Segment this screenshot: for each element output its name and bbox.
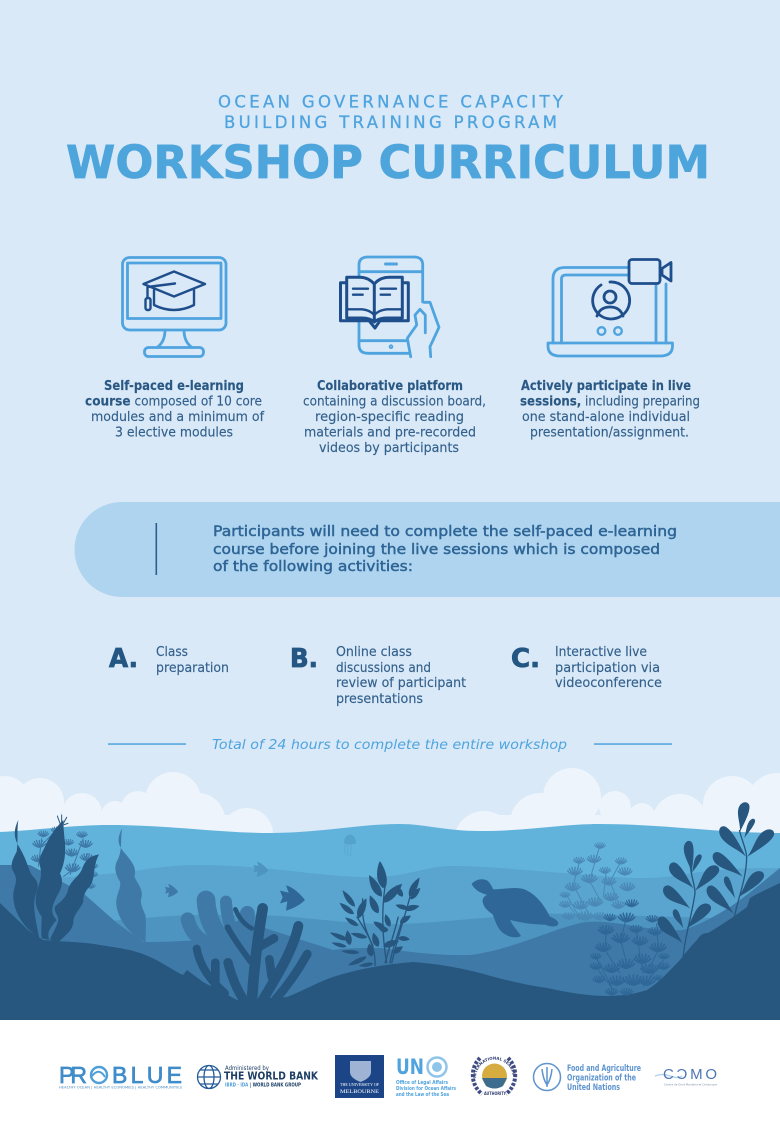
subtitle: BUILDING TRAINING PROGRAM	[224, 113, 557, 132]
leaf plant right part	[385, 897, 410, 963]
logo: CDMO: Centre de Droit Maritime et Océanique	[664, 1082, 717, 1086]
text: live sessions	[520, 379, 700, 441]
activity A: Class	[156, 645, 188, 660]
clouds	[0, 768, 780, 871]
activity B: presentations	[336, 692, 423, 707]
kelp frond 3	[50, 854, 99, 943]
logo: PROBLUE: HEALTHY OCEAN | HEALTHY ECONOMIES | HEALTHY COMMUNITIES	[59, 1086, 182, 1090]
text: self-paced e-learning: 3 elective modules	[115, 426, 233, 441]
seaweed with round leaves	[683, 830, 747, 957]
activity A: preparation	[156, 661, 229, 676]
logo: UN Ocean Affairs: Office of Legal Affairs	[396, 1080, 448, 1086]
logo: FAO: United Nations	[567, 1083, 620, 1093]
callout text: course before joining the live sessions which is composed	[213, 542, 660, 558]
logo: University of Melbourne: MELBOURNE	[340, 1089, 380, 1095]
coral tip	[57, 815, 68, 825]
plants right foreground	[375, 801, 776, 995]
text: self-paced e-learning: course composed of 10 core	[85, 395, 262, 410]
leaf plant	[376, 861, 388, 889]
logo: International Seabed Authority: INTERNATIONAL SEABED	[473, 1056, 516, 1078]
activity C: participation via	[555, 661, 660, 676]
activity A	[109, 644, 229, 676]
turtle	[472, 879, 558, 937]
fish: faint	[253, 862, 268, 877]
back coral	[188, 900, 248, 950]
water layer 1	[0, 824, 780, 1020]
logo: UN Ocean Affairs: Division for Ocean Affairs	[396, 1086, 456, 1092]
text: self-paced e-learning	[85, 379, 264, 441]
fish: large	[280, 885, 305, 911]
ocean scene	[0, 768, 780, 1020]
logo: FAO	[534, 1064, 641, 1093]
logo: PROBLUE: PR	[59, 1062, 87, 1088]
logo: PROBLUE	[59, 1062, 182, 1090]
tuft plant front	[590, 900, 669, 995]
text: live sessions: presentation/assignment.	[530, 426, 689, 441]
logo: University of Melbourne	[335, 1055, 384, 1098]
callout text	[213, 524, 677, 575]
text: live sessions: sessions, including preparing	[520, 395, 700, 410]
text: self-paced e-learning: Self-paced e-learning	[104, 379, 244, 394]
activity C: Interactive live	[555, 645, 647, 660]
activity B: review of participant	[336, 676, 466, 691]
activity B: B.	[290, 644, 318, 674]
water layer 5: seabed	[0, 883, 780, 1020]
activity C: C.	[511, 644, 540, 674]
icon: laptop with video call	[548, 260, 672, 356]
icon: monitor with graduation cap	[122, 258, 226, 356]
logo: International Seabed Authority	[470, 1056, 518, 1096]
leaf plant stems	[357, 887, 403, 966]
logo: World Bank: THE WORLD BANK	[224, 1070, 319, 1082]
fish: small left	[165, 884, 178, 897]
activity B: discussions and	[336, 661, 431, 676]
icon: phone with open book and hand	[340, 257, 439, 357]
logo: CDMO: CƆMO	[663, 1066, 717, 1083]
text: collaborative platform: Collaborative platform	[317, 379, 463, 394]
tuft plant back	[559, 843, 635, 920]
activity C: videoconference	[555, 676, 662, 691]
jellyfish	[344, 835, 356, 856]
logo: UN Ocean Affairs: UN	[396, 1055, 424, 1079]
logo strip	[0, 1020, 780, 1129]
kelp frond 2	[36, 820, 65, 940]
logo: World Bank: IBRD · IDA | WORLD BANK GROUP	[225, 1082, 301, 1088]
title block	[66, 92, 710, 189]
callout band	[74, 502, 780, 597]
plants left foreground	[12, 815, 405, 1003]
kelp background	[115, 828, 146, 943]
text: live sessions: Actively participate in live	[521, 379, 691, 394]
main heading: WORKSHOP CURRICULUM	[66, 136, 710, 189]
kelp frond 1	[12, 820, 39, 938]
logo: PROBLUE: BLUE	[112, 1062, 182, 1088]
text: collaborative platform: region-specific reading	[315, 410, 464, 425]
front coral	[197, 908, 307, 1003]
activity B	[290, 644, 466, 707]
subtitle: OCEAN GOVERNANCE CAPACITY	[218, 92, 564, 112]
subtitle	[218, 92, 564, 132]
tuft plant left	[31, 827, 98, 888]
activity B: Online class	[336, 645, 412, 660]
logo: University of Melbourne: THE UNIVERSITY OF	[340, 1083, 379, 1087]
text: collaborative platform: videos by participants	[319, 441, 459, 456]
activity C	[511, 644, 662, 691]
logo: FAO: Organization of the	[567, 1074, 636, 1084]
logo: International Seabed Authority: AUTHORITY	[484, 1091, 506, 1096]
water layer 3	[0, 914, 780, 1020]
text: live sessions: one stand-alone individual	[522, 410, 690, 425]
logo: UN Ocean Affairs: and the Law of the Sea	[396, 1092, 449, 1098]
text: collaborative platform: containing a discussion board,	[303, 395, 486, 410]
water layer 4	[0, 865, 780, 1020]
logo: World Bank: Administered by	[225, 1064, 269, 1072]
text: collaborative platform: materials and pre-recorded	[304, 426, 476, 441]
callout text: Participants will need to complete the self-paced e-learning	[213, 524, 677, 540]
text: collaborative platform	[303, 379, 486, 456]
logo: FAO: Food and Agriculture	[567, 1064, 641, 1074]
total hours note: Total of 24 hours to complete the entire workshop	[212, 738, 567, 753]
water layer 2	[0, 865, 780, 1020]
logo: UN Ocean Affairs	[396, 1055, 456, 1098]
activity A: A.	[109, 644, 138, 674]
callout text: of the following activities:	[213, 559, 413, 575]
logo: World Bank	[198, 1064, 319, 1088]
text: self-paced e-learning: modules and a minimum of	[91, 410, 264, 425]
